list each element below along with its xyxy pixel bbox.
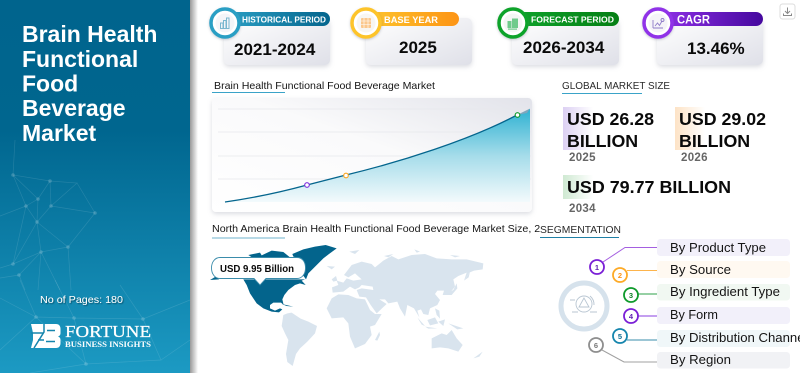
segment 6: region: 6 xyxy=(594,341,598,350)
segment 6: region: By Region xyxy=(670,353,731,367)
panel: base year: 2025 xyxy=(399,38,437,57)
heading: global market size: GLOBAL MARKET SIZE xyxy=(562,80,670,92)
segment 5: distribution channel: By Distribution Channel xyxy=(670,331,800,345)
segment 4: form xyxy=(624,307,790,324)
segment 3: ingredient type: By Ingredient Type xyxy=(670,285,780,299)
stat: 2025 market size xyxy=(563,107,654,164)
segment 6: region xyxy=(589,338,790,368)
segment 5: distribution channel xyxy=(613,329,800,347)
title: Brain Health xyxy=(22,21,157,47)
segment 3: ingredient type xyxy=(624,284,790,302)
data point 2025 xyxy=(344,173,348,178)
segment 1: product type xyxy=(590,239,790,274)
panel: forecast period: 2026-2034 xyxy=(523,38,605,57)
callout: USD 9.95 Billion: USD 9.95 Billion xyxy=(220,264,294,275)
panel: sidebar xyxy=(0,0,198,373)
area under curve xyxy=(225,109,530,202)
icon: forecast chart xyxy=(508,18,518,30)
icon: calendar xyxy=(361,18,371,28)
logo: Fortune Business Insights: FORTUNE xyxy=(65,322,151,341)
segment 4: form: By Form xyxy=(670,308,718,322)
arrow tip xyxy=(517,108,530,115)
segment 1: product type: 1 xyxy=(595,263,599,272)
panel: CAGR: CAGR xyxy=(677,14,711,26)
stat: 2026 market size: USD 29.02 xyxy=(679,109,766,129)
map: North America highlighted xyxy=(210,245,337,312)
page count: No of Pages: 180 xyxy=(40,294,123,306)
callout: USD 9.95 Billion xyxy=(212,258,306,285)
panel: CAGR xyxy=(644,9,763,65)
segment 2: source: By Source xyxy=(670,263,731,277)
heading: market chart: Brain Health Functional Food Beverage Market xyxy=(214,80,435,92)
panel: base year xyxy=(352,9,472,65)
title: Functional xyxy=(22,46,138,72)
panel: historical period xyxy=(211,9,330,65)
data point 2034 xyxy=(515,113,520,117)
stat: 2026 market size: BILLION xyxy=(679,131,750,151)
icon: growth chart xyxy=(653,18,664,28)
title: Market xyxy=(22,120,96,146)
panel: CAGR: 13.46% xyxy=(687,39,745,58)
heading: segmentation: SEGMENTATION xyxy=(540,224,621,236)
stat: 2034 market size: 2034 xyxy=(569,203,596,215)
map: South America xyxy=(282,313,317,366)
growth line xyxy=(225,115,517,202)
panel: historical period: HISTORICAL PERIOD xyxy=(242,14,326,24)
stat: 2034 market size xyxy=(563,175,731,215)
segment 2: source: 2 xyxy=(618,271,622,280)
panel: market growth chart xyxy=(212,98,532,212)
stat: 2026 market size xyxy=(675,107,766,164)
panel: base year: BASE YEAR xyxy=(384,15,439,25)
icon: download button xyxy=(780,4,795,19)
panel: segmentation diagram xyxy=(561,239,800,368)
world map xyxy=(210,245,483,366)
map: Africa, Eurasia, Oceania xyxy=(327,249,483,358)
segment 3: ingredient type: 3 xyxy=(629,291,633,300)
icon: central segmentation hub xyxy=(561,283,607,329)
segment 4: form: 4 xyxy=(629,312,634,321)
stat: 2025 market size: USD 26.28 xyxy=(567,109,654,129)
heading: North America market size: North America Brain Health Functional Food Beverage Market Size, 2025 xyxy=(212,223,558,235)
data point 2021 xyxy=(305,183,309,187)
stat: 2034 market size: USD 79.77 BILLION xyxy=(567,177,731,197)
stat: 2025 market size: 2025 xyxy=(569,152,596,164)
icon: bar chart xyxy=(220,18,229,28)
panel: historical period: 2021-2024 xyxy=(234,40,316,59)
segment 5: distribution channel: 5 xyxy=(618,332,622,341)
stat: 2026 market size: 2026 xyxy=(681,152,708,164)
title: Food xyxy=(22,70,78,96)
segment 2: source xyxy=(613,261,790,282)
panel: forecast period xyxy=(499,9,619,65)
stat: 2025 market size: BILLION xyxy=(567,131,638,151)
logo: Fortune Business Insights xyxy=(31,322,151,349)
title: Beverage xyxy=(22,95,126,121)
panel: forecast period: FORECAST PERIOD xyxy=(531,14,614,24)
segment 1: product type: By Product Type xyxy=(670,241,766,255)
logo: Fortune Business Insights: BUSINESS INSIGHTS xyxy=(65,339,151,349)
